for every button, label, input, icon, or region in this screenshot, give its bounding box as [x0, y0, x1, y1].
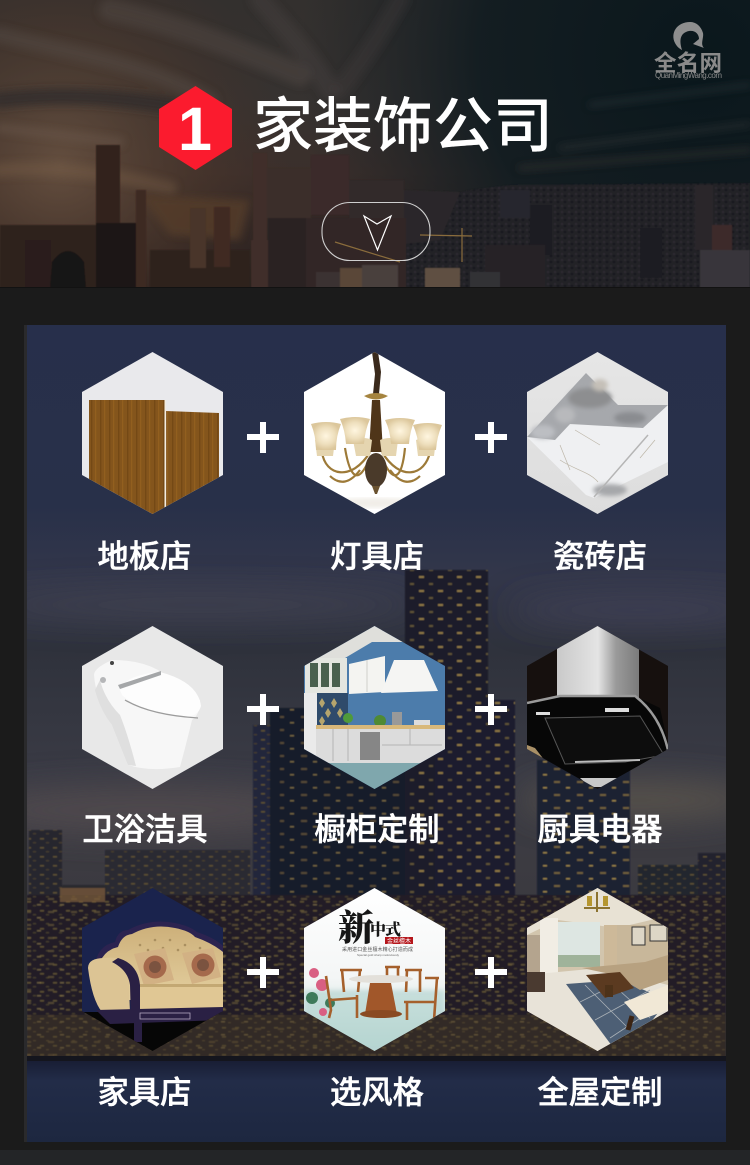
- icon: new-Chinese style poster hexagon: 新: [338, 900, 374, 951]
- logo name: 全名网: [654, 51, 722, 76]
- watermark logo: 全名网: [654, 22, 722, 80]
- label: 厨具电器: [537, 812, 663, 847]
- icon: new-Chinese style poster hexagon: [304, 888, 445, 1051]
- right city texture: [405, 183, 750, 288]
- label: 家具店: [98, 1075, 191, 1110]
- item: custom cabinets: [304, 626, 446, 847]
- header photo: city at dusk: [0, 0, 750, 289]
- operator: plus: [247, 422, 279, 453]
- item: flooring store: [82, 352, 223, 574]
- icon: marble tile hexagon: [527, 352, 668, 514]
- icon: sofa hexagon: [82, 888, 223, 1051]
- icon: range hood hexagon: [527, 626, 668, 789]
- label: 卫浴洁具: [82, 812, 208, 847]
- icon: toilet hexagon: [82, 626, 223, 789]
- label: 选风格: [330, 1075, 424, 1110]
- icon: new-Chinese style poster hexagon: 中式: [370, 917, 401, 940]
- down arrow button: [322, 202, 430, 260]
- item: whole-house custom: [527, 888, 668, 1110]
- icon: new-Chinese style poster hexagon: 采用进口金丝檀木精心打造而成: [342, 946, 413, 953]
- panel: store types: [0, 325, 750, 1142]
- icon: red hexagon number badge: [159, 86, 232, 170]
- icon: living room hexagon: [527, 888, 668, 1051]
- item: tile store: [527, 352, 668, 574]
- label: 地板店: [98, 539, 191, 574]
- skyline: towers: [405, 570, 488, 900]
- icon: logo swirl: [673, 22, 704, 50]
- icon: red hexagon number badge: 1: [178, 95, 212, 163]
- river: [420, 195, 530, 250]
- icon: chandelier hexagon: [304, 352, 445, 514]
- icon: wood floor hexagon: [82, 352, 223, 514]
- left city: [0, 225, 96, 288]
- item: sanitary ware: [82, 626, 223, 847]
- panel background photo: [0, 325, 750, 1142]
- logo url: QuanMingWang.com: [655, 71, 722, 80]
- icon: new-Chinese style poster hexagon: Special gold sharp meticulously: [357, 953, 400, 957]
- item: kitchen appliances: [527, 626, 668, 847]
- item: furniture store: [82, 888, 223, 1110]
- title block: [159, 86, 553, 170]
- bottom band: [0, 1150, 750, 1165]
- item: style selection: [304, 888, 445, 1110]
- label: 橱柜定制: [314, 812, 440, 847]
- icon: kitchen hexagon: [304, 626, 446, 789]
- label: 灯具店: [330, 539, 424, 574]
- operator: plus: [475, 957, 507, 988]
- heading: 家装饰公司: [253, 93, 553, 160]
- panel frame: [24, 325, 27, 1142]
- operator: plus: [247, 957, 279, 988]
- label: 瓷砖店: [553, 539, 647, 574]
- icon: new-Chinese style poster hexagon: 金丝檀木: [387, 937, 411, 945]
- operator: plus: [475, 422, 507, 453]
- operator: plus: [475, 694, 507, 725]
- operator: plus: [247, 694, 279, 725]
- item: lighting store: [304, 352, 445, 574]
- label: 全屋定制: [537, 1075, 663, 1110]
